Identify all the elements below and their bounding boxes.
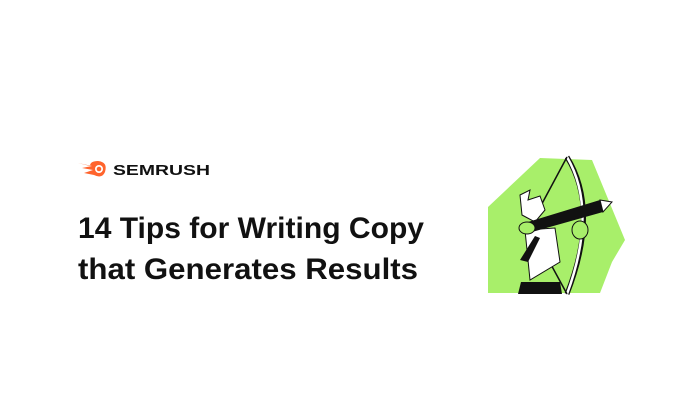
illustration: archer with pencil arrow (488, 156, 625, 295)
title (78, 212, 424, 286)
pencil arrow (528, 200, 612, 232)
title: 14 Tips for Writing Copy (78, 212, 424, 245)
head/hair (520, 190, 545, 222)
title: that Generates Results (78, 253, 418, 286)
logo: semrush (78, 161, 210, 179)
green background shape (488, 158, 625, 293)
hand (572, 221, 588, 239)
body (525, 228, 560, 280)
logo: semrush: SEMRUSH (113, 162, 210, 179)
bow (530, 157, 584, 294)
icon: semrush fire ball (78, 161, 106, 176)
